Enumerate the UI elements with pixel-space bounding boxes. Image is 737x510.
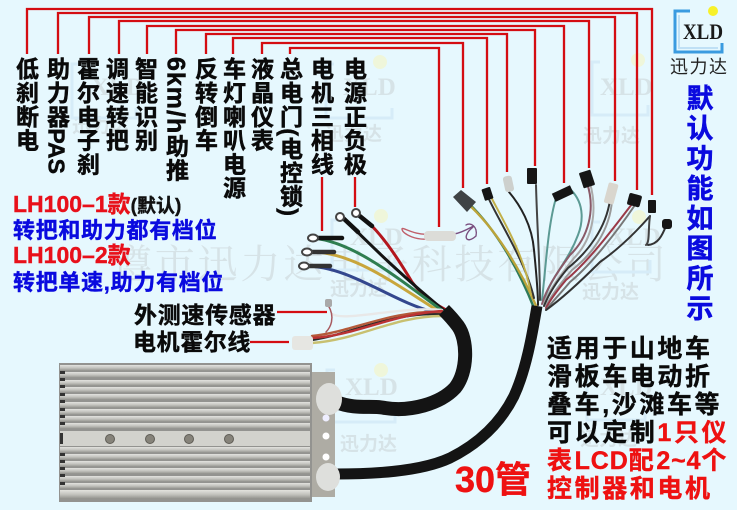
watermarks: 迅力达 <box>72 111 129 138</box>
model 1 text: 转把和助力都有档位 <box>13 218 217 243</box>
hall connector <box>292 336 313 350</box>
watermarks: XLD <box>608 224 661 251</box>
label: low brake: 低刹断电 <box>12 57 38 152</box>
watermarks: XLD <box>91 74 144 101</box>
applications text: 滑板车电动折 <box>547 363 713 391</box>
label: hall brake: 霍尔电子刹 <box>74 57 100 176</box>
watermarks: XLD <box>345 374 398 401</box>
label: main switch: 总电门(电控锁) <box>276 57 302 217</box>
watermarks: 迅力达 <box>582 277 639 304</box>
watermarks: 迅力达 <box>583 121 640 148</box>
label: PAS: 助力器 PAS <box>44 57 70 174</box>
lug terminals <box>299 209 360 270</box>
label: throttle: 调速转把 <box>102 57 128 152</box>
logo <box>670 6 728 77</box>
logo mark: XLD <box>683 19 723 44</box>
label: power poles: 电源正负极 <box>340 57 366 176</box>
watermarks: 迅力达 <box>580 424 637 451</box>
label: lights horn power: 车灯喇叭电源 <box>220 57 246 200</box>
logo mark <box>674 6 724 54</box>
signal connectors <box>453 168 672 229</box>
watermarks: XLD <box>350 224 403 251</box>
label: LCD: 液晶仪表 <box>248 57 274 152</box>
key switch fuse <box>402 224 476 241</box>
applications text <box>547 335 729 503</box>
side title: 默认功能如图所示 <box>682 84 712 324</box>
hall and sensor wires <box>312 305 442 343</box>
watermarks: XLD <box>600 374 653 401</box>
black cable sheaths <box>336 306 537 474</box>
watermarks: 迅力达 <box>340 429 397 456</box>
mounting bracket <box>312 372 335 497</box>
watermarks: 遵市迅力达电子科技有限公司 <box>112 233 668 290</box>
model 2 text: 转把单速,助力有档位 <box>13 270 224 295</box>
heat sink body <box>59 363 312 502</box>
signal wires <box>463 183 666 310</box>
cable glands <box>316 383 342 491</box>
watermarks: XLD <box>343 74 396 101</box>
label: 6km/h assist: 6km/h 助推 <box>162 57 190 182</box>
label: smart detect: 智能识别 <box>132 57 158 152</box>
logo text: 迅力达 <box>670 57 728 77</box>
label: motor three phase: 电机三相线 <box>308 57 334 176</box>
30 tubes: 30管 <box>455 459 531 500</box>
applications text: 叠车,沙滩车等 <box>547 391 722 419</box>
model 1 title: LH100–1款(默认) <box>13 191 181 217</box>
sensor label: 外测速传感器 <box>134 302 276 328</box>
applications text: 适用于山地车 <box>547 335 713 363</box>
applications text: 表LCD配2~4个 <box>547 447 729 475</box>
label: reverse: 反转倒车 <box>192 57 218 152</box>
applications text: 控制器和电机 <box>547 475 713 503</box>
watermarks: 迅力达 <box>330 274 387 301</box>
hall wire label: 电机霍尔线 <box>133 329 251 355</box>
applications text: 可以定制1只仪 <box>547 419 729 447</box>
screws <box>106 434 234 444</box>
watermarks: 迅力达 <box>325 119 382 146</box>
model 2 title: LH100–2款 <box>13 242 131 268</box>
watermarks: XLD <box>600 74 653 101</box>
motor phase wires <box>305 213 450 312</box>
speed sensor connector <box>325 299 332 307</box>
model notes <box>13 191 224 295</box>
